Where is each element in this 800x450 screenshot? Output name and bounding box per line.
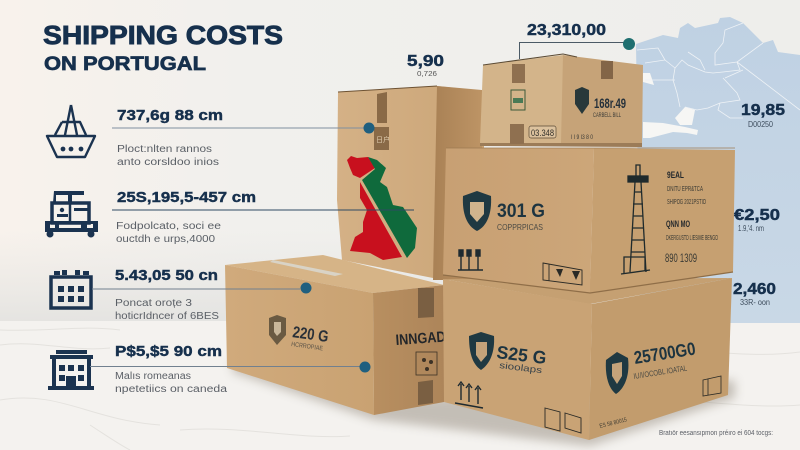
- stat 2: ouctdh e urps,4000: [116, 234, 216, 245]
- box: top small box: CARBELL BILL: [593, 112, 621, 119]
- stat 3: [115, 267, 219, 322]
- title: SHIPPING COSTS: [43, 20, 283, 50]
- map of Europe background: [636, 17, 800, 323]
- box: flat low box: HCRROPIAE: [291, 341, 324, 353]
- QR label: 日户: [376, 135, 390, 144]
- box: bottom large box: [443, 278, 732, 440]
- label: 2,460: [733, 281, 776, 307]
- background wall: [0, 0, 800, 323]
- icon: building: [48, 350, 94, 390]
- stat 2: 25S,195,5-457 cm: [117, 189, 256, 206]
- shield icon: [269, 315, 286, 345]
- label: 5,90: 5,90: [407, 53, 444, 70]
- label: 5,90: 0,726: [417, 69, 437, 78]
- stat 1: Ploct:nlten rannos: [117, 144, 212, 155]
- stat 3: 5.43,05 50 cn: [115, 267, 218, 284]
- box: flat low box: [225, 255, 446, 415]
- box: bottom large box: IU/I/OCOBL IOATAL: [633, 364, 688, 381]
- stat 1: [117, 107, 223, 168]
- box: bottom large box: sioolaps: [499, 360, 543, 375]
- icon: calendar: [51, 270, 91, 308]
- box spec text: DKERGUSTD LIESIME BENGO: [666, 235, 718, 242]
- marble floor: [0, 321, 800, 450]
- box label text: 03.348: [531, 128, 554, 138]
- label: 19,85: [741, 102, 785, 129]
- label: 19,85: 19,85: [741, 102, 785, 119]
- footnote: Bratıör eesansıpmon préıro ei 604 tocgs:: [659, 430, 773, 437]
- QR label: [374, 127, 390, 150]
- stat 4: P$5,$5 90 cm: [115, 343, 222, 360]
- label: €2,50: [734, 207, 780, 233]
- stat 3: Poncat oroțe 3: [115, 298, 193, 309]
- box spec text: QNN MO: [666, 219, 690, 229]
- box: flat low box: 220 G: [291, 324, 329, 346]
- box: bottom large box: 25700G0: [632, 338, 697, 368]
- connector 2: [112, 209, 414, 211]
- box spec text: [665, 170, 718, 265]
- box: middle large box: COPPRPICAS: [497, 222, 543, 232]
- connector 1: [112, 122, 374, 134]
- shield icon: [606, 352, 628, 394]
- box spec text: SHIPOG 2021PSTIO: [667, 199, 706, 206]
- shield icon: [463, 191, 491, 231]
- stat 2: [116, 189, 256, 245]
- label: €2,50: 1.9,'4. nm: [738, 223, 764, 233]
- stat 3: hoticrIdncer of 6BES: [115, 311, 219, 322]
- stat 2: Fodpolcato, soci ee: [116, 221, 222, 232]
- floor shadow under boxes: [232, 360, 735, 446]
- tower icon: [621, 165, 650, 274]
- box: top small box: I I 9 I3 8 0: [571, 134, 593, 141]
- label: 19,85: D00250: [748, 120, 773, 129]
- tape: [377, 92, 387, 123]
- label: 23,310,00 with connector: 23,310,00: [527, 22, 606, 39]
- box: flat low box: INNGAD: [395, 329, 446, 349]
- box spec text: 890 1309: [665, 251, 697, 265]
- box: top small box: [480, 54, 643, 147]
- Portugal flag map: [347, 156, 417, 260]
- icon: ship: [47, 105, 95, 157]
- box: middle large box: [443, 148, 735, 293]
- box: top small box: 168r.49: [594, 95, 626, 111]
- box: tall box with Portugal map: [337, 86, 484, 280]
- box: bottom large box: ES 58 80015: [599, 417, 628, 430]
- label: €2,50: €2,50: [734, 207, 780, 224]
- icon: truck: [45, 191, 98, 238]
- label: 2,460: 33R- oon: [740, 298, 770, 307]
- shield icon: [575, 87, 589, 114]
- up arrows icon: [455, 382, 483, 408]
- handling icon: [458, 250, 483, 270]
- stat 1: anto corsldoo inios: [117, 157, 219, 168]
- title: ON PORTUGAL: [44, 53, 206, 75]
- connector 3: [92, 282, 312, 294]
- label: 23,310,00 with connector: [520, 22, 635, 59]
- stat 4: Malıs romeanas: [115, 371, 191, 382]
- label: 2,460: 2,460: [733, 281, 776, 298]
- stat 4: npetetiics on caneda: [115, 384, 228, 395]
- box: bottom large box: S25 G: [496, 342, 548, 368]
- stat 1: 737,6g 88 cm: [117, 107, 223, 124]
- box spec text: 9EAL: [667, 170, 684, 180]
- connector 4: [90, 362, 370, 372]
- stat 4: [115, 343, 228, 395]
- title: [43, 20, 283, 75]
- label: 5,90: [407, 53, 444, 78]
- box spec text: DNITU EPR&TCA: [667, 186, 703, 193]
- box: middle large box: 301 G: [497, 201, 545, 222]
- shield icon: [469, 332, 494, 370]
